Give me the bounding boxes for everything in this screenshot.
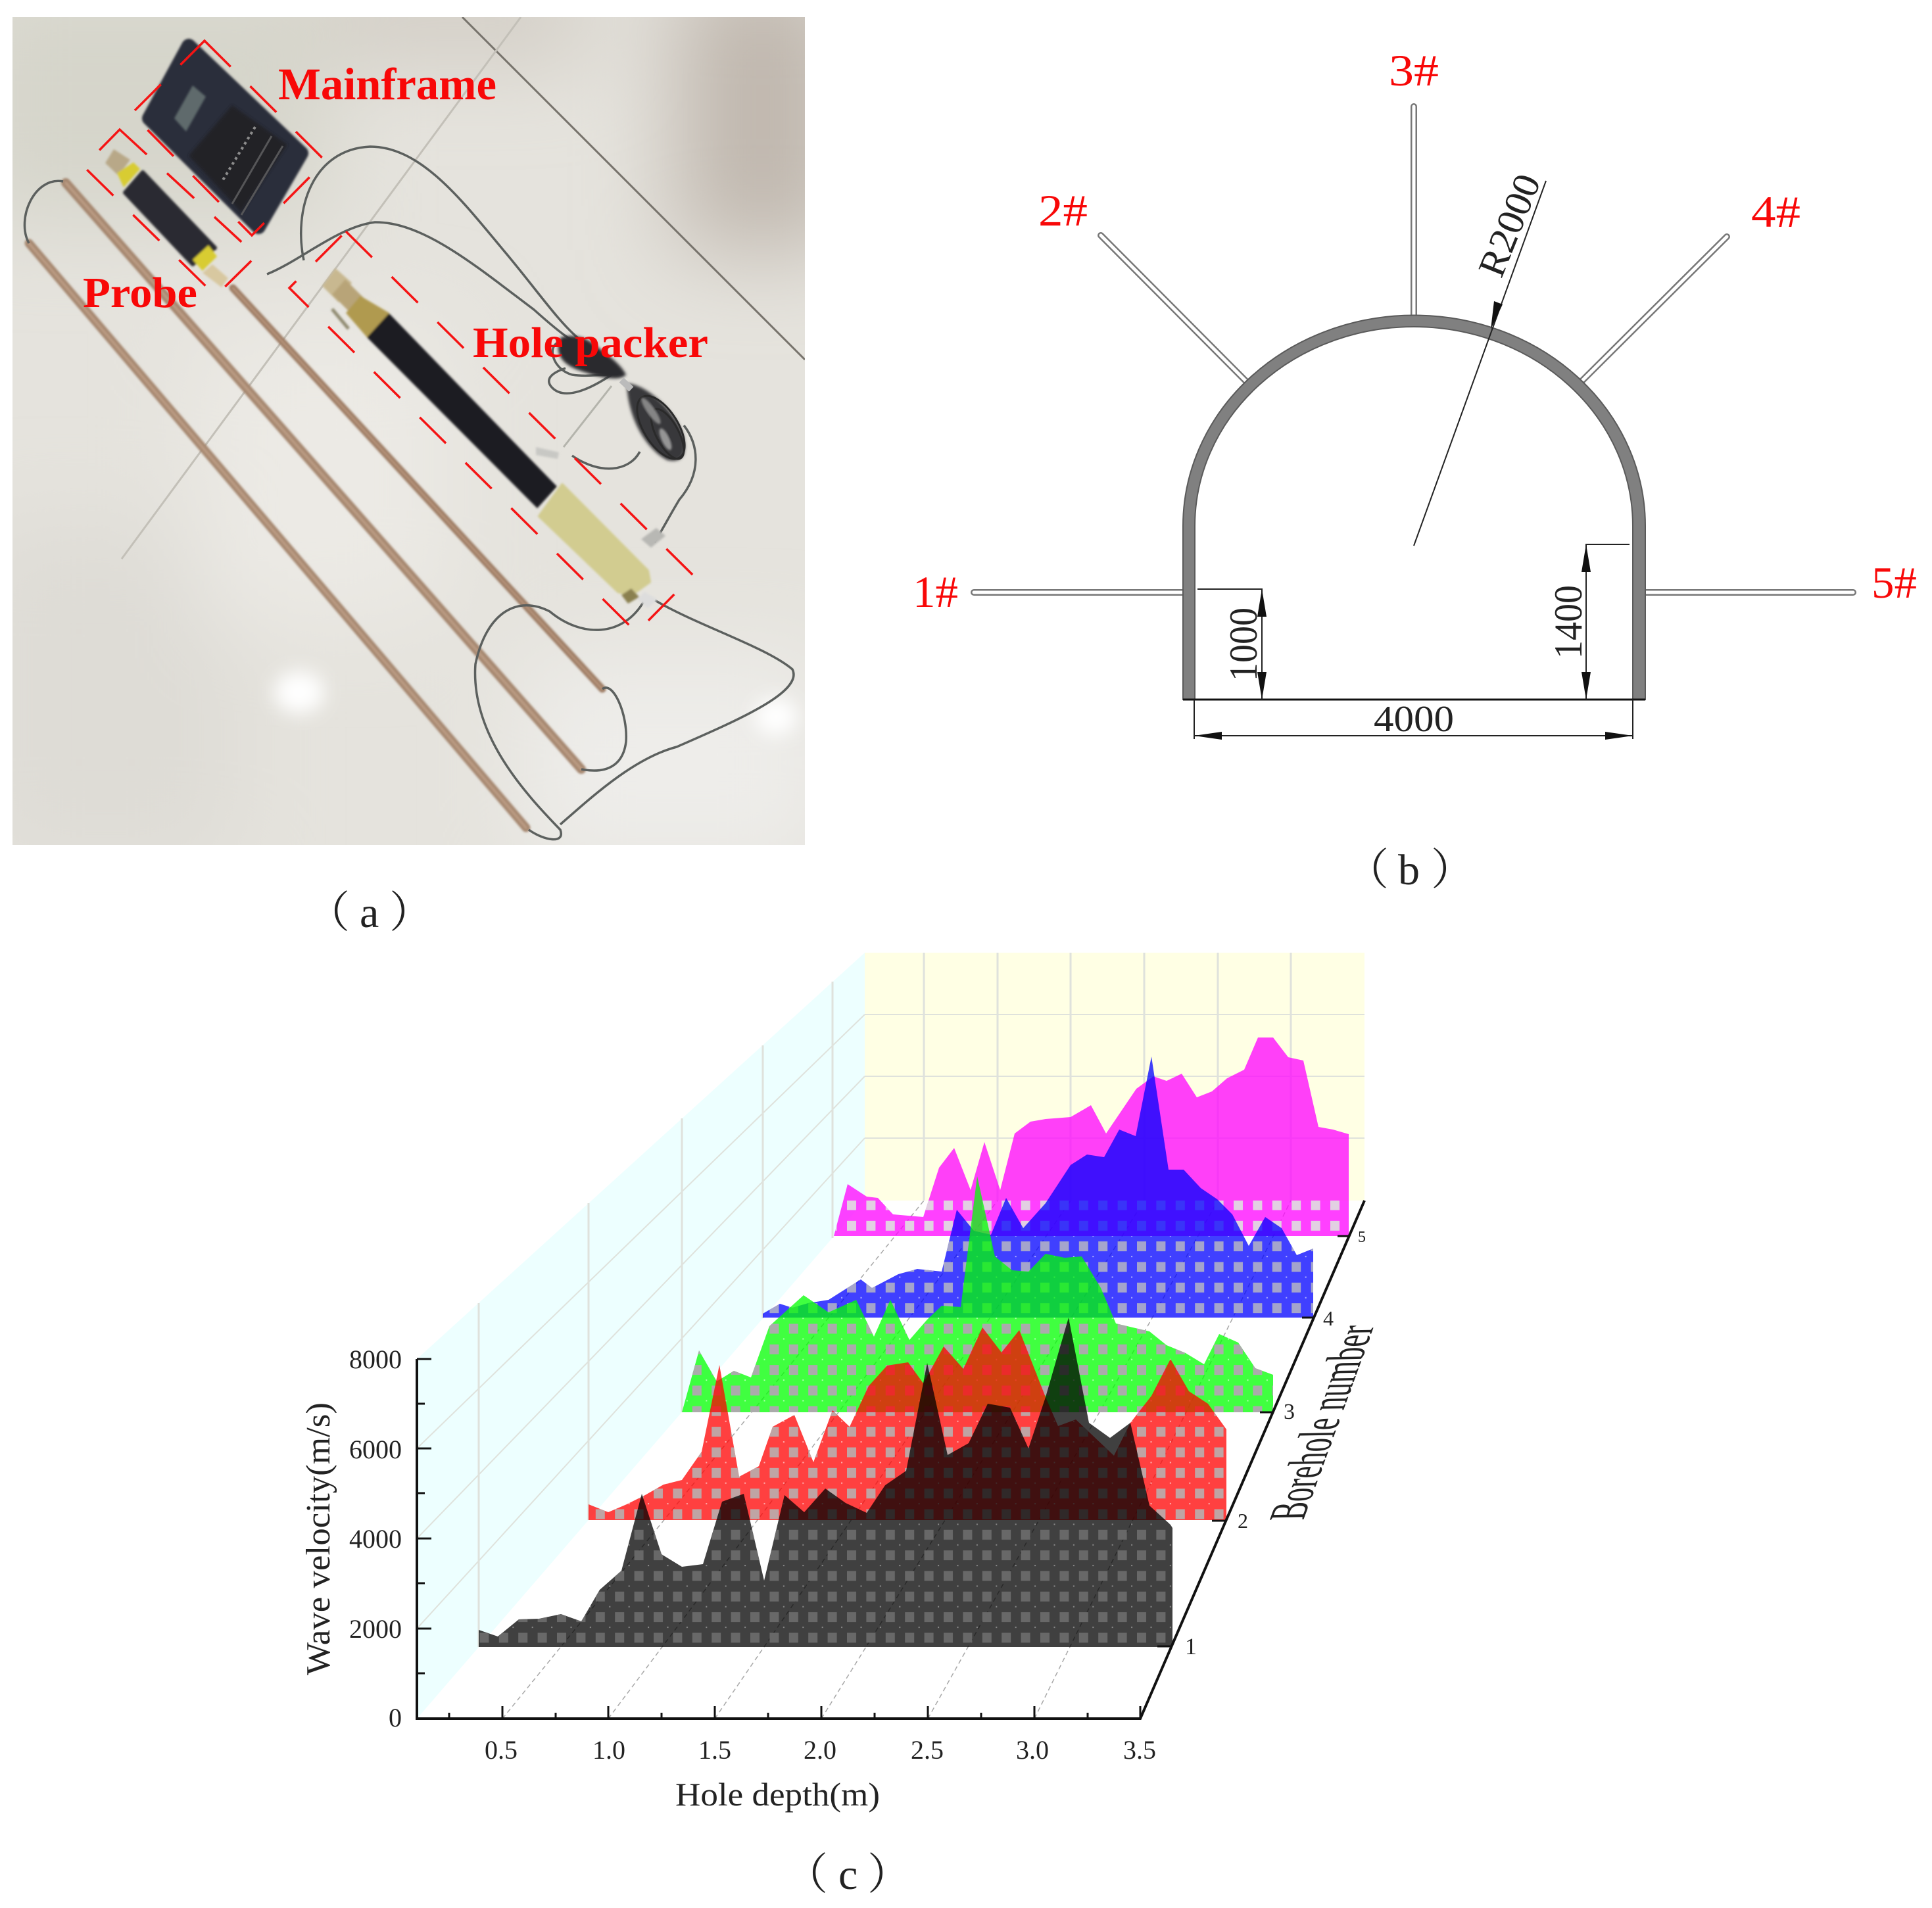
caption (c): （c） (785, 1851, 911, 1899)
floor background (12, 17, 805, 845)
depth axis title: Borehole number (1257, 1325, 1386, 1521)
borehole tick labels: 5 (1358, 1229, 1366, 1246)
tunnel lining (1183, 316, 1645, 700)
y tick labels: 0 (389, 1703, 402, 1732)
borehole label 5#: 5# (1872, 558, 1917, 608)
caption (b): （b） (1345, 846, 1474, 894)
borehole label 2#: 2# (1038, 185, 1088, 235)
borehole tick labels: 4 (1323, 1306, 1334, 1330)
series: borehole 1 (479, 1318, 1173, 1647)
hole packer (322, 268, 665, 608)
axes (417, 1201, 1364, 1719)
copper rods (29, 183, 602, 828)
y tick labels: 4000 (349, 1524, 402, 1554)
borehole tick labels: 2 (1238, 1509, 1248, 1533)
panel (a): instrument photo (0, 0, 848, 937)
x tick labels: 3.0 (1016, 1735, 1049, 1765)
x tick labels: 2.0 (804, 1735, 836, 1765)
y tick labels: 8000 (349, 1345, 402, 1374)
panel (c): 3D wave velocity chart (300, 953, 1386, 1899)
borehole label 1#: 1# (913, 567, 958, 617)
x tick labels: 0.5 (485, 1735, 518, 1765)
x tick labels: 1.0 (592, 1735, 625, 1765)
dashed boxes (84, 41, 693, 632)
caption (a): （a） (306, 889, 433, 937)
x axis title: Hole depth(m) (675, 1776, 880, 1813)
x tick labels: 1.5 (698, 1735, 731, 1765)
borehole tick labels (1185, 1229, 1366, 1659)
floor line (1183, 698, 1645, 701)
dimension 1400: 1400 (1547, 585, 1590, 659)
mainframe device (149, 46, 301, 227)
y axis title: Wave velocity(m/s) (300, 1402, 337, 1675)
back wall (865, 953, 1364, 1201)
y tick labels: 6000 (349, 1435, 402, 1464)
probe (105, 149, 228, 287)
floor dashed lines (502, 1201, 1291, 1719)
x tick labels (485, 1735, 1156, 1765)
panel (b): tunnel section (913, 45, 1917, 894)
x tick labels: 2.5 (911, 1735, 944, 1765)
dimension 1000 (1197, 589, 1267, 700)
label: Mainframe: Mainframe (278, 59, 496, 109)
x tick labels: 3.5 (1123, 1735, 1156, 1765)
radius leader R2000 (1414, 168, 1549, 546)
radius leader R2000: R2000 (1470, 168, 1549, 283)
connecting cables (24, 147, 794, 840)
label: Probe: Probe (83, 269, 197, 317)
cable coil (558, 336, 694, 467)
photo of instrument set (12, 17, 805, 845)
series: borehole 4 (763, 1057, 1315, 1318)
borehole label 3#: 3# (1389, 45, 1439, 95)
borehole label 4#: 4# (1751, 187, 1800, 237)
borehole tick labels: 3 (1284, 1400, 1295, 1424)
dimension 1000: 1000 (1222, 608, 1265, 681)
series: borehole 5 (834, 1037, 1353, 1236)
boreholes (974, 107, 1853, 592)
y tick labels (349, 1345, 402, 1732)
series: borehole 2 (589, 1327, 1230, 1521)
dimension 1400 (1547, 544, 1630, 700)
borehole tick labels: 1 (1185, 1633, 1197, 1659)
series: borehole 3 (682, 1176, 1274, 1412)
dimension 4000: 4000 (1374, 699, 1454, 740)
label: Hole packer: Hole packer (473, 319, 708, 367)
y tick labels: 2000 (349, 1614, 402, 1644)
dimension 4000 (1194, 699, 1633, 740)
wall grid lines (417, 953, 1364, 1647)
left wall (417, 953, 865, 1719)
